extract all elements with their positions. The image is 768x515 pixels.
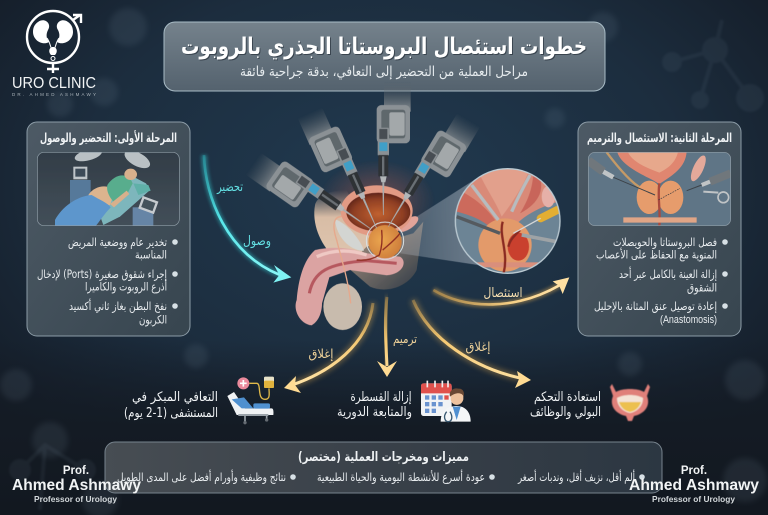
logo subline: DR. AHMED ASHMAWY bbox=[12, 92, 96, 97]
prof label: Prof. bbox=[681, 465, 707, 477]
role: Professor of Urology bbox=[652, 494, 735, 504]
label: closure right: إغلاق bbox=[466, 339, 490, 355]
arrow: repair to catheter removal bbox=[377, 297, 397, 377]
pubic bone bbox=[335, 219, 364, 251]
catheter text: إزالة القسطرة bbox=[350, 390, 412, 405]
bullet 1: فصل البروستاتا والحويصلات bbox=[613, 235, 717, 250]
phase one heading: المرحلة الأولى: التحضير والوصول bbox=[40, 130, 177, 145]
continence text: البولي والوظائف bbox=[530, 405, 601, 420]
bullet 1 bbox=[68, 235, 178, 262]
bullet 2: إزالة العينة بالكامل عبر أحد bbox=[619, 266, 717, 282]
robotic arm 4 bbox=[383, 109, 480, 241]
outcome: early recovery bbox=[124, 377, 274, 424]
bullet 3 bbox=[594, 299, 728, 326]
robotic arm 3 bbox=[377, 82, 411, 215]
label: repair: ترميم bbox=[393, 331, 417, 347]
icon: hospital bed with IV bbox=[227, 377, 274, 424]
testis bbox=[323, 283, 362, 330]
title: خطوات استئصال البروستاتا الجذري بالروبوت bbox=[182, 35, 588, 61]
recovery text: التعافي المبكر في bbox=[132, 390, 218, 405]
bullet 1 bbox=[596, 235, 728, 262]
icon: calendar and doctor bbox=[421, 381, 471, 422]
title panel bbox=[164, 22, 605, 91]
icon: bladder bbox=[610, 384, 650, 421]
recovery text bbox=[124, 390, 218, 421]
arrow: closure to recovery bbox=[284, 303, 373, 393]
name: Ahmed Ashmawy bbox=[12, 477, 141, 494]
arrow: preparation and access (teal) bbox=[204, 155, 291, 283]
glow behind bladder bbox=[318, 160, 435, 240]
outcome: catheter removal and follow-up bbox=[337, 381, 471, 422]
label: preparation: تحضير bbox=[216, 180, 243, 195]
role: Professor of Urology bbox=[34, 494, 117, 504]
signature right bbox=[629, 465, 759, 504]
bullet 3 bbox=[69, 298, 178, 328]
catheter text bbox=[337, 390, 412, 420]
bullet 3: نفخ البطن بغاز ثاني أكسيد bbox=[69, 298, 167, 314]
catheter text: والمتابعة الدورية bbox=[337, 405, 412, 420]
arrow: resection (gold) bbox=[433, 277, 569, 304]
continence text bbox=[530, 390, 601, 420]
features heading: مميزات ومخرجات العملية (مختصر) bbox=[298, 450, 469, 465]
seminal vesicle bbox=[396, 213, 421, 235]
prostate bbox=[357, 222, 404, 260]
feature: better long-term results: نتائج وظيفية وأورام أفضل على المدى الطويل bbox=[117, 469, 286, 485]
signature left bbox=[12, 465, 141, 504]
subtitle: مراحل العملية من التحضير إلى التعافي، بدقة جراحية فائقة bbox=[240, 64, 528, 80]
bladder bbox=[341, 185, 413, 236]
bullet 2 bbox=[619, 266, 728, 296]
feature: less pain: ألم أقل، نزيف أقل، وندبات أصغر bbox=[517, 469, 635, 485]
bullet 2: أذرع الروبوت والكاميرا bbox=[85, 278, 167, 294]
bullet 3: (Anastomosis) bbox=[660, 314, 717, 326]
label: access: وصول bbox=[243, 234, 271, 249]
central illustration: robotic arms and pelvic anatomy bbox=[245, 82, 563, 330]
name: Ahmed Ashmawy bbox=[629, 477, 759, 494]
penis bbox=[296, 248, 404, 325]
magnified surgical view bbox=[453, 165, 563, 277]
bullet 2 bbox=[37, 267, 178, 294]
bullet 1: المناسبة bbox=[135, 248, 167, 262]
lower pelvic shadow bbox=[347, 222, 423, 290]
label: resection: استئصال bbox=[484, 286, 522, 301]
panel: phase two bbox=[578, 122, 741, 336]
panel: phase one bbox=[27, 122, 190, 336]
label: closure left: إغلاق bbox=[308, 346, 334, 362]
title foreground: خطوات استئصال البروستاتا الجذري بالروبوت bbox=[181, 34, 587, 60]
logo emblem bbox=[27, 11, 81, 73]
bullet 2: الشقوق bbox=[687, 280, 717, 296]
vas deferens bbox=[334, 216, 351, 303]
prof label: Prof. bbox=[63, 465, 89, 477]
arrow: closure to continence bbox=[413, 300, 531, 388]
logo wordmark: URO CLINIC bbox=[12, 75, 96, 92]
robotic arm 1 bbox=[245, 146, 374, 251]
logo: Uro Clinic bbox=[12, 11, 96, 97]
bullet 3: إعادة توصيل عنق المثانة بالإحليل bbox=[594, 299, 717, 314]
panel: features and outcomes bbox=[105, 442, 662, 493]
feature: faster return: عودة أسرع للأنشطة اليومية والحياة الطبيعية bbox=[317, 469, 485, 485]
bullet 1: المنوية مع الحفاظ على الأعصاب bbox=[596, 248, 717, 262]
image: prostate dissection bbox=[588, 150, 731, 226]
pelvic silhouette bbox=[314, 190, 387, 287]
recovery text: المستشفى (1-2 يوم) bbox=[124, 406, 218, 421]
image: patient on operating table bbox=[37, 146, 179, 227]
outcome: continence and function bbox=[530, 384, 650, 421]
bullet 2: إجراء شقوق صغيرة (Ports) لإدخال bbox=[37, 267, 167, 282]
continence text: استعادة التحكم bbox=[534, 390, 601, 405]
robotic arm 2 bbox=[297, 104, 383, 239]
bullet 3: الكربون bbox=[139, 312, 167, 328]
magnifier cone bbox=[400, 177, 478, 265]
bullet 1: تخدير عام ووضعية المريض bbox=[68, 235, 167, 250]
